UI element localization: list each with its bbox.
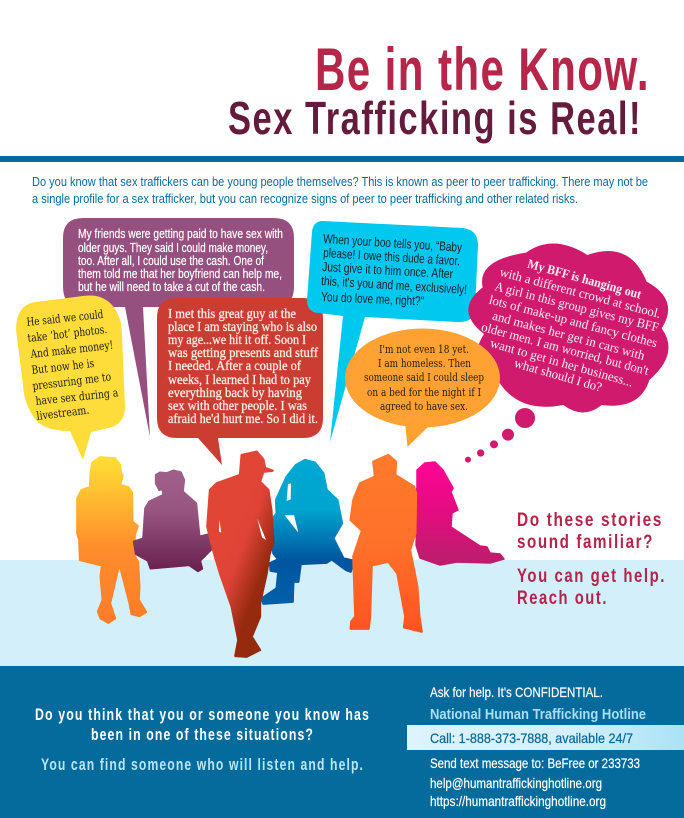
speech bubble: orange — [345, 328, 500, 447]
silhouette: yellow orange girl — [77, 457, 146, 623]
silhouettes group — [77, 452, 504, 657]
silhouette: orange man — [351, 455, 422, 632]
title — [228, 36, 650, 144]
speech bubble: orange: I'm not even 18 yet. — [379, 342, 469, 356]
silhouette: blue seated girl — [262, 460, 353, 604]
thought cloud: pink: what should I do? — [513, 355, 604, 395]
speech bubble: cyan: please! I owe this dude a favor. — [323, 245, 460, 268]
call to action text: Reach out. — [517, 588, 608, 609]
thought cloud: pink: want to get in her business... — [489, 335, 635, 390]
speech bubble: purple — [63, 218, 294, 437]
hotline info: National Human Trafficking Hotline — [430, 706, 646, 723]
footer question — [35, 706, 370, 774]
light blue floor — [0, 560, 684, 666]
speech bubble: purple: them told me that her boyfriend can help me, — [78, 266, 282, 281]
speech bubble: yellow: have sex during a — [35, 385, 119, 408]
speech bubble: orange: agreed to have sex. — [380, 399, 468, 413]
thought cloud: pink: A girl in this group gives my BFF — [493, 278, 660, 335]
silhouette: purple seated girl — [134, 471, 215, 571]
speech bubble: purple: older guys. They said I could make money, — [78, 240, 268, 255]
speech bubble: cyan — [307, 221, 478, 442]
hotline info: Ask for help. It's CONFIDENTIAL. — [430, 684, 603, 700]
thought cloud: pink: and makes her get in cars with — [491, 308, 647, 363]
footer band — [0, 666, 684, 818]
speech bubble: orange: on a bed for the night if I — [367, 385, 481, 399]
speech bubble: orange: I am homeless. Then — [378, 356, 471, 370]
speech bubble: red: weeks, I learned I had to pay — [168, 372, 311, 387]
thought dots — [465, 408, 535, 463]
speech bubble: red: sex with other people. I was — [168, 398, 307, 413]
footer question: been in one of these situations? — [91, 726, 314, 744]
speech bubble: red: place I am staying who is also — [168, 319, 317, 334]
speech bubble: yellow: pressuring me to — [32, 369, 112, 393]
speech bubble: purple: too. After all, I could use the cash. One of — [78, 253, 264, 268]
speech bubble: purple: but he will need to take a cut of the cash. — [78, 279, 265, 294]
intro text: a single profile for a sex trafficker, but you can recognize signs of peer to peer trafficking and other related risks. — [32, 192, 578, 206]
speech bubble: red: was getting presents and stuff — [168, 345, 318, 360]
speech bubble: yellow: And make money! — [29, 338, 114, 361]
thought cloud: pink — [465, 244, 669, 463]
speech bubble: red: afraid he'd hurt me. So I did it. — [168, 411, 318, 426]
speech bubble: red: my age...we hit it off. Soon I — [168, 332, 306, 347]
speech bubble: cyan: You do love me, right?" — [321, 289, 425, 309]
speech bubble: cyan: Just give it to him once. After — [322, 259, 454, 281]
speech bubble: yellow — [16, 295, 125, 460]
speech bubble: red: I met this great guy at the — [168, 306, 296, 321]
hotline info: help@humantraffickinghotline.org — [430, 775, 602, 791]
speech bubble: yellow: take ‘hot’ photos. — [27, 322, 108, 345]
intro text — [32, 175, 648, 206]
speech bubble: red — [157, 298, 323, 465]
speech bubble: yellow: He said we could — [26, 307, 104, 329]
speech bubble: yellow: But now he is — [31, 356, 95, 377]
speech bubble: red: everything back by having — [168, 385, 302, 400]
thought cloud: pink: lots of make-up and fancy clothes — [488, 292, 659, 350]
hotline info: Call: 1-888-373-7888, available 24/7 — [430, 730, 633, 746]
hotline info: Send text message to: BeFree or 233733 — [430, 755, 640, 771]
speech bubble: red: I needed. After a couple of — [168, 358, 301, 373]
thought cloud: pink: My BFF is hanging out — [526, 256, 644, 302]
hotline call band — [407, 725, 684, 750]
speech bubble: yellow: livestream. — [36, 403, 90, 423]
speech bubble: purple: My friends were getting paid to have sex with — [78, 226, 283, 241]
hotline info: https://humantraffickinghotline.org — [430, 793, 606, 809]
footer question: You can find someone who will listen and help. — [41, 756, 364, 774]
silhouette: pink seated girl — [410, 462, 504, 565]
call to action text: sound familiar? — [517, 532, 654, 553]
footer question: Do you think that you or someone you know has — [35, 706, 370, 724]
speech bubble: cyan: this, it's you and me, exclusively! — [321, 273, 467, 297]
thought cloud: pink: older men. I am worried, but don't — [480, 319, 651, 378]
speech bubble: cyan: When your boo tells you, “Baby — [323, 231, 463, 255]
silhouette: red man with cap — [207, 452, 273, 657]
speech bubble: orange: someone said I could sleep — [364, 370, 484, 384]
thought cloud: pink: with a different crowd at school. — [498, 264, 663, 321]
call to action text — [517, 510, 666, 609]
hotline info — [407, 684, 684, 809]
